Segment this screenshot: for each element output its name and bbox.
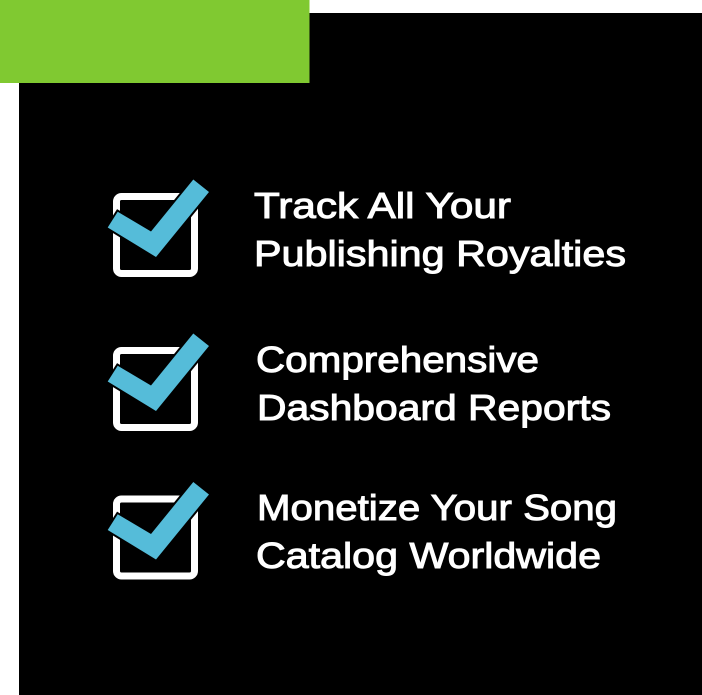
text: monetize your song catalog worldwide — [256, 487, 617, 576]
text: track all your publishing royalties — [254, 185, 626, 274]
text: comprehensive dashboard reports — [256, 339, 611, 428]
item 2: dashboard reports — [108, 334, 611, 428]
text: comprehensive dashboard reports: Dashboard Reports — [257, 387, 611, 428]
icon: checkbox 2 — [108, 334, 209, 428]
text: monetize your song catalog worldwide: Monetize Your Song — [257, 487, 617, 528]
text: comprehensive dashboard reports: Comprehensive — [256, 339, 539, 380]
item 3: monetize catalog — [108, 482, 617, 576]
icon: checkbox 1 — [108, 180, 209, 274]
text: track all your publishing royalties: Track All Your — [254, 185, 511, 226]
text: track all your publishing royalties: Publishing Royalties — [254, 233, 626, 274]
text: monetize your song catalog worldwide: Catalog Worldwide — [256, 535, 601, 576]
item 1: track royalties — [108, 180, 626, 274]
green accent banner — [0, 0, 310, 83]
icon: checkbox 3 — [108, 482, 209, 576]
